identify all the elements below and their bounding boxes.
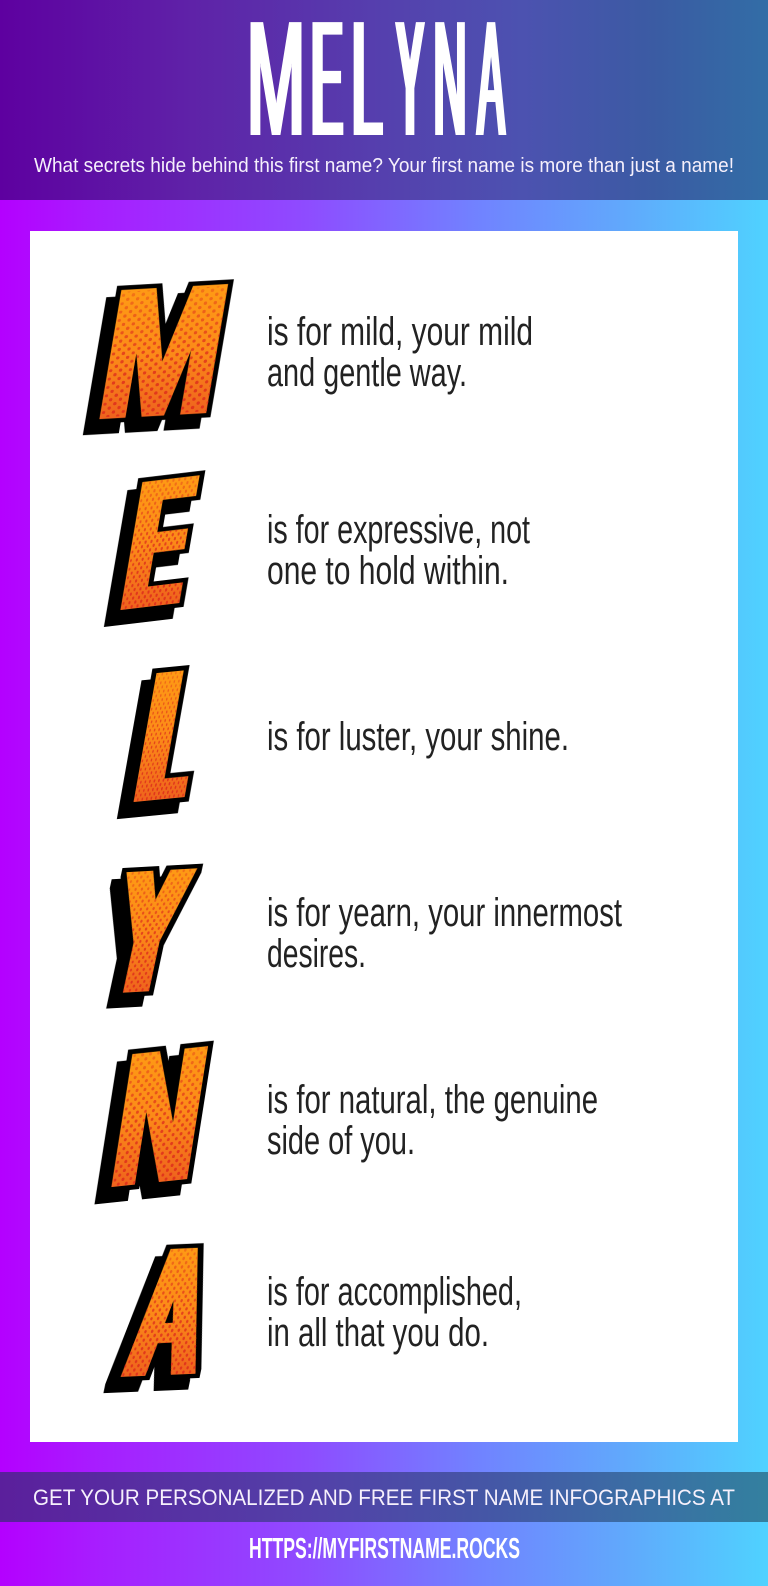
letter L badge: L	[122, 630, 199, 843]
letter L badge: L	[131, 629, 208, 842]
letter E badge: E	[114, 435, 206, 649]
letter N badge: N	[102, 1004, 218, 1228]
text: A: in all that you do.	[267, 1311, 489, 1355]
text: A	[267, 1270, 522, 1355]
text: N: side of you.	[267, 1119, 415, 1163]
text: M: is for mild, your mild	[267, 310, 533, 354]
letter M badge: M	[88, 246, 240, 456]
letter Y badge: Y	[97, 831, 200, 1032]
text: Y: is for yearn, your innermost	[267, 891, 622, 935]
text: E: one to hold within.	[267, 549, 509, 593]
letter M badge: M	[92, 246, 244, 456]
letter E badge: E	[114, 435, 206, 649]
letter Y badge: Y	[104, 831, 207, 1032]
letter N badge: N	[106, 1003, 222, 1228]
letter Y badge: Y	[97, 831, 200, 1032]
letter M badge: M	[88, 246, 240, 456]
letter E badge: E	[108, 436, 200, 650]
text: E: is for expressive, not	[267, 508, 530, 552]
text: Y	[267, 891, 622, 976]
letter A badge: A	[110, 1207, 221, 1417]
text: N	[267, 1078, 598, 1163]
letter Y badge	[106, 864, 204, 1009]
subtitle: What secrets hide behind this first name? Your first name is more than just a name!	[34, 155, 734, 177]
text: Y: desires.	[267, 932, 366, 976]
row M	[82, 279, 532, 436]
letter A badge: A	[116, 1207, 227, 1416]
row L	[122, 628, 569, 843]
footer band	[0, 1472, 768, 1522]
letter N badge: N	[97, 1004, 213, 1229]
text: M: and gentle way.	[267, 351, 467, 395]
title	[247, 0, 505, 171]
letter L badge	[116, 665, 194, 820]
letter Y badge: Y	[91, 831, 194, 1032]
row A	[103, 1242, 520, 1394]
text: A: is for accomplished,	[267, 1270, 522, 1314]
letter L badge: L	[131, 629, 208, 842]
row N	[97, 1003, 598, 1229]
footer url: HTTPS://MYFIRSTNAME.ROCKS	[249, 1533, 520, 1565]
letter N badge: N	[102, 1004, 218, 1228]
white content panel	[30, 231, 738, 1442]
letter E badge: E	[120, 435, 211, 649]
header band	[0, 0, 768, 200]
letter E badge	[104, 470, 206, 627]
letter A badge: A	[116, 1207, 227, 1416]
text: E	[267, 508, 530, 593]
footer call to action: GET YOUR PERSONALIZED AND FREE FIRST NAME INFOGRAPHICS AT	[33, 1485, 735, 1510]
text: M	[267, 310, 533, 395]
letter L badge: L	[140, 628, 217, 842]
letter A badge: A	[121, 1207, 233, 1416]
letter M badge: M	[83, 246, 236, 456]
text: L: is for luster, your shine.	[267, 715, 569, 759]
row Y	[106, 864, 622, 1009]
letter A badge	[103, 1242, 204, 1394]
text: N: is for natural, the genuine	[267, 1078, 598, 1122]
row E	[104, 470, 530, 627]
